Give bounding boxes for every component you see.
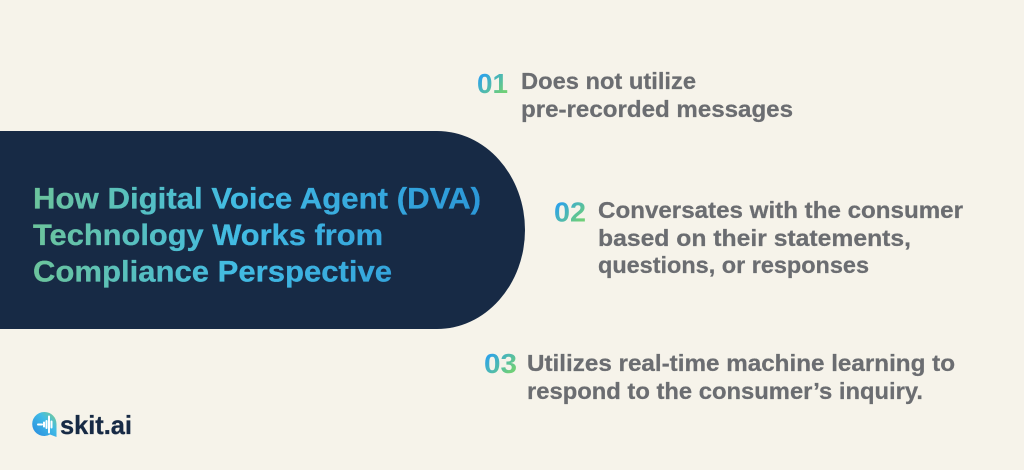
wordmark: skit.ai <box>60 410 132 440</box>
item 01 <box>477 68 793 122</box>
text: item 02: based on their statements, <box>598 225 911 251</box>
item 02 <box>554 196 963 278</box>
icon: voice bubble <box>32 412 56 437</box>
text: item 01: pre-recorded messages <box>521 96 793 122</box>
text: item 01: Does not utilize <box>521 68 696 94</box>
number 02: 02 <box>554 196 586 228</box>
logo: skit.ai <box>32 410 132 440</box>
item 03 <box>484 348 955 404</box>
text: item 02 <box>598 197 963 278</box>
text: item 03 <box>527 350 955 404</box>
text: item 01 <box>521 68 793 122</box>
panel: title banner <box>0 131 525 329</box>
title <box>33 182 481 288</box>
text: item 02: questions, or responses <box>598 252 869 278</box>
title: Technology Works from <box>33 219 383 252</box>
number 03: 03 <box>484 348 517 379</box>
text: item 02: Conversates with the consumer <box>598 197 963 223</box>
text: item 03: respond to the consumer’s inquiry. <box>527 378 923 404</box>
number 01: 01 <box>477 68 508 99</box>
title: Compliance Perspective <box>33 256 392 288</box>
text: item 03: Utilizes real-time machine learning to <box>527 350 955 376</box>
title: How Digital Voice Agent (DVA) <box>33 182 481 216</box>
